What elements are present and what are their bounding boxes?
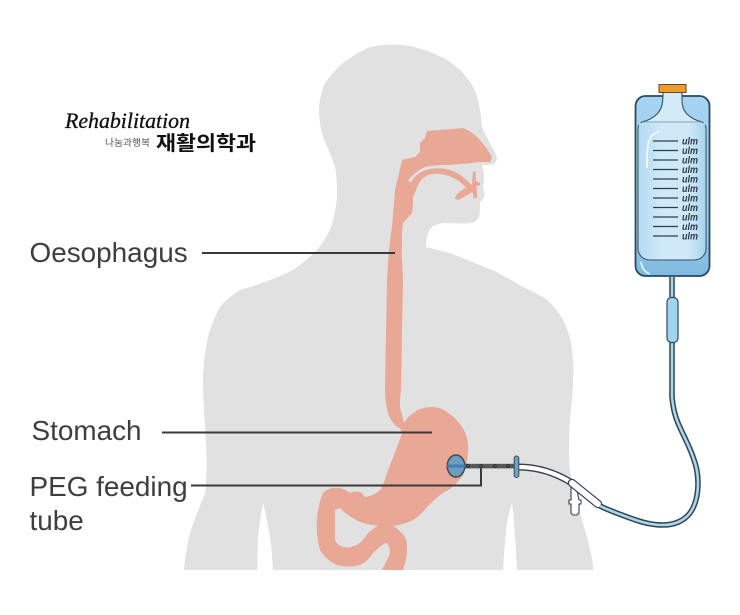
scale labels: ulm [682, 212, 698, 224]
inner dark tube [448, 464, 515, 468]
scale labels: ulm [682, 184, 698, 195]
scale ticks [653, 141, 678, 236]
label: Stomach: Stomach [32, 415, 142, 446]
label: Oesophagus: Oesophagus [30, 237, 188, 268]
scale labels: ulm [682, 194, 698, 204]
scale labels: ulm [682, 136, 698, 148]
tongue and lips [455, 172, 480, 200]
scale labels: ulm [682, 165, 698, 176]
label: PEG feeding tube [30, 466, 481, 536]
logo: Rehabilitation: 재활의학과 [156, 132, 256, 155]
PEG tube [447, 455, 598, 515]
feeding bag [636, 84, 710, 276]
scale labels: ulm [682, 146, 698, 157]
drip chamber [667, 298, 678, 342]
scale labels: ulm [682, 232, 698, 242]
label: PEG feeding tube: tube [30, 505, 84, 536]
cap [659, 84, 686, 92]
retention balloon [447, 455, 465, 477]
flange [514, 456, 519, 478]
bag body [636, 96, 710, 276]
bag neck and inner fluid [638, 92, 706, 260]
flexible external tube [518, 467, 572, 483]
label: PEG feeding tube: PEG feeding [30, 471, 188, 502]
feeding tube line [600, 277, 698, 525]
scale labels: ulm [682, 174, 698, 186]
logo: Rehabilitation [64, 108, 256, 155]
stomach and intestine [317, 407, 468, 570]
digestive tract: nasal cavity, pharynx and oesophagus [317, 128, 492, 570]
scale labels [682, 136, 698, 242]
Y connector [572, 483, 598, 504]
side port [569, 487, 581, 515]
scale labels: ulm [682, 203, 698, 214]
scale labels: ulm [682, 156, 698, 166]
logo: Rehabilitation: Rehabilitation [64, 108, 190, 133]
logo: Korean subtitle: 나눔과행복 [105, 137, 150, 149]
body silhouette [184, 45, 593, 570]
scale labels: ulm [682, 222, 698, 233]
